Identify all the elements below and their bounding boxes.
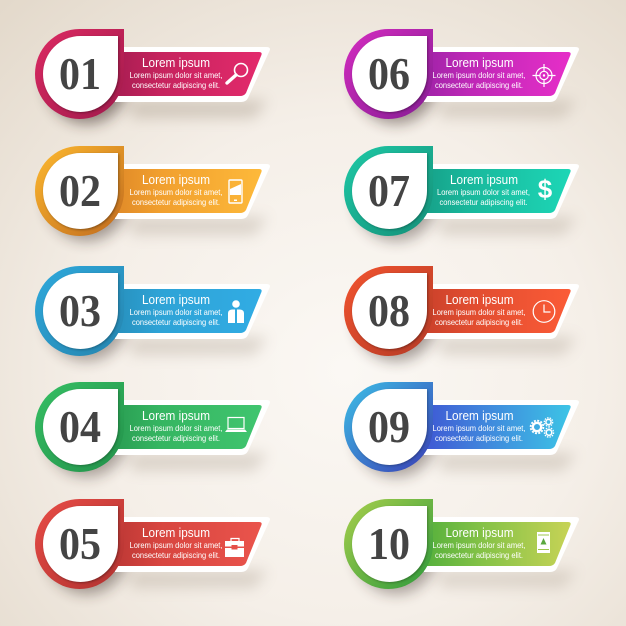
item 03: person	[35, 266, 270, 361]
item 04: laptop: Lorem ipsum dolor sit amet,	[130, 423, 222, 433]
item 04: laptop: consectetur adipiscing elit.	[132, 433, 220, 443]
icon: magnifier	[227, 64, 248, 83]
icon: target	[532, 64, 556, 87]
item 09: gears: 09	[368, 401, 410, 452]
item 06: target: consectetur adipiscing elit.	[435, 80, 523, 90]
item 06: target: Lorem ipsum dolor sit amet,	[432, 70, 526, 80]
item 04: laptop: 04	[59, 401, 101, 452]
icon: briefcase	[225, 538, 244, 557]
icon: laptop	[225, 418, 247, 432]
item 02: mobile: Lorem ipsum dolor sit amet,	[130, 187, 222, 197]
item 07: dollar	[344, 146, 579, 241]
icon: device	[537, 532, 550, 553]
item 09: gears: consectetur adipiscing elit.	[435, 433, 523, 443]
item 01: search: Lorem ipsum dolor sit amet,	[130, 70, 222, 80]
item 05: briefcase: 05	[59, 518, 101, 569]
item 08: clock: Lorem ipsum dolor sit amet,	[432, 307, 526, 317]
item 09: gears: Lorem ipsum dolor sit amet,	[432, 423, 526, 433]
item 07: dollar: Lorem ipsum	[450, 173, 518, 187]
item 06: target	[344, 29, 579, 124]
icon: clock	[533, 301, 555, 322]
item 10: battery phone: Lorem ipsum	[446, 526, 514, 540]
item 08: clock: 08	[368, 285, 410, 336]
item 03: person: Lorem ipsum dolor sit amet,	[130, 307, 222, 317]
item 09: gears: Lorem ipsum	[446, 409, 514, 423]
item 09: gears	[344, 382, 579, 477]
icon: phone	[229, 180, 242, 203]
item 08: clock: consectetur adipiscing elit.	[435, 317, 523, 327]
item 07: dollar: 07	[368, 165, 410, 216]
item 03: person: Lorem ipsum	[142, 293, 210, 307]
item 02: mobile: 02	[59, 165, 101, 216]
icon: dollar: $	[538, 174, 553, 204]
item 01: search: Lorem ipsum	[142, 56, 210, 70]
item 06: target: Lorem ipsum	[446, 56, 514, 70]
item 10: battery phone: 10	[368, 518, 410, 569]
item 05: briefcase: Lorem ipsum dolor sit amet,	[130, 540, 222, 550]
item 06: target: 06	[368, 48, 410, 99]
icon: person	[228, 300, 244, 323]
item 01: search	[35, 29, 270, 124]
icon: gears	[531, 418, 554, 437]
item 10: battery phone	[344, 499, 579, 594]
item 08: clock	[344, 266, 579, 361]
item 02: mobile	[35, 146, 270, 241]
item 05: briefcase: Lorem ipsum	[142, 526, 210, 540]
item 08: clock: Lorem ipsum	[446, 293, 514, 307]
item 07: dollar: consectetur adipiscing elit.	[440, 197, 528, 207]
item 01: search: 01	[59, 48, 101, 99]
item 02: mobile: consectetur adipiscing elit.	[132, 197, 220, 207]
item 10: battery phone: consectetur adipiscing elit.	[435, 550, 523, 560]
item 05: briefcase	[35, 499, 270, 594]
item 01: search: consectetur adipiscing elit.	[132, 80, 220, 90]
item 02: mobile: Lorem ipsum	[142, 173, 210, 187]
item 03: person: consectetur adipiscing elit.	[132, 317, 220, 327]
item 05: briefcase: consectetur adipiscing elit.	[132, 550, 220, 560]
item 10: battery phone: Lorem ipsum dolor sit amet,	[432, 540, 526, 550]
item 03: person: 03	[59, 285, 101, 336]
item 04: laptop	[35, 382, 270, 477]
item 04: laptop: Lorem ipsum	[142, 409, 210, 423]
item 07: dollar: Lorem ipsum dolor sit amet,	[437, 187, 530, 197]
